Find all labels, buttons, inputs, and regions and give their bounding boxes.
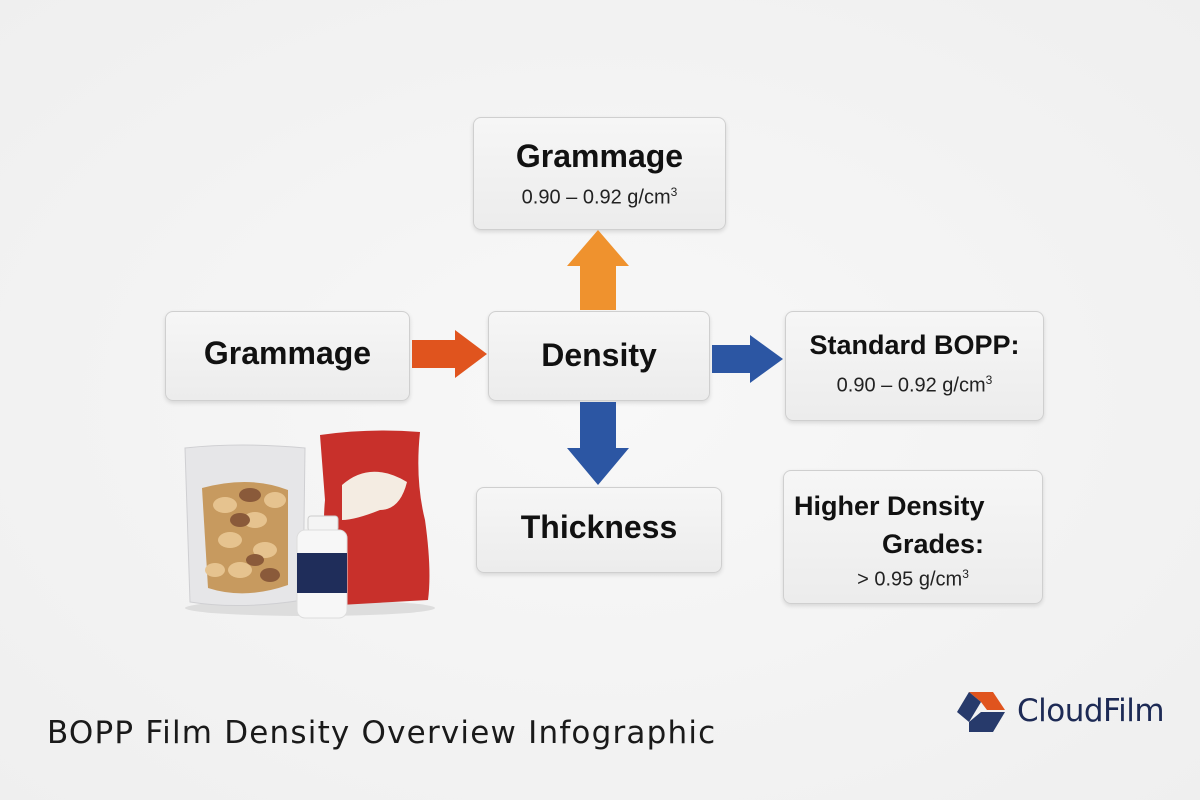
box: top grammage: Grammage [516,138,683,174]
box: density: Density [541,337,657,373]
box: top grammage: 0.90 – 0.92 g/cm3 [522,185,677,209]
box: thickness: Thickness [521,509,677,545]
arrow: up orange [567,230,629,310]
box: thickness [476,487,722,573]
illustration: packaging [184,430,435,618]
box: standard BOPP [785,311,1044,421]
box: left grammage: Grammage [204,335,371,371]
box: standard BOPP: Standard BOPP: [809,330,1020,360]
box: left grammage [165,311,410,401]
box: density [488,311,710,401]
logo [957,692,1164,732]
box: higher density: Higher Density [794,491,985,521]
box: higher density: Grades: [882,529,984,559]
box: top grammage [473,117,726,230]
title: BOPP Film Density Overview Infographic [47,715,716,751]
box: higher density [783,470,1043,604]
arrow: right orange-red [412,330,487,378]
logo text: CloudFilm [1017,693,1164,729]
box: standard BOPP: 0.90 – 0.92 g/cm3 [837,373,992,397]
icon: logo [957,692,1005,732]
arrow: right blue [712,335,783,383]
box: higher density: > 0.95 g/cm3 [857,567,969,591]
arrow: down blue [567,402,629,485]
